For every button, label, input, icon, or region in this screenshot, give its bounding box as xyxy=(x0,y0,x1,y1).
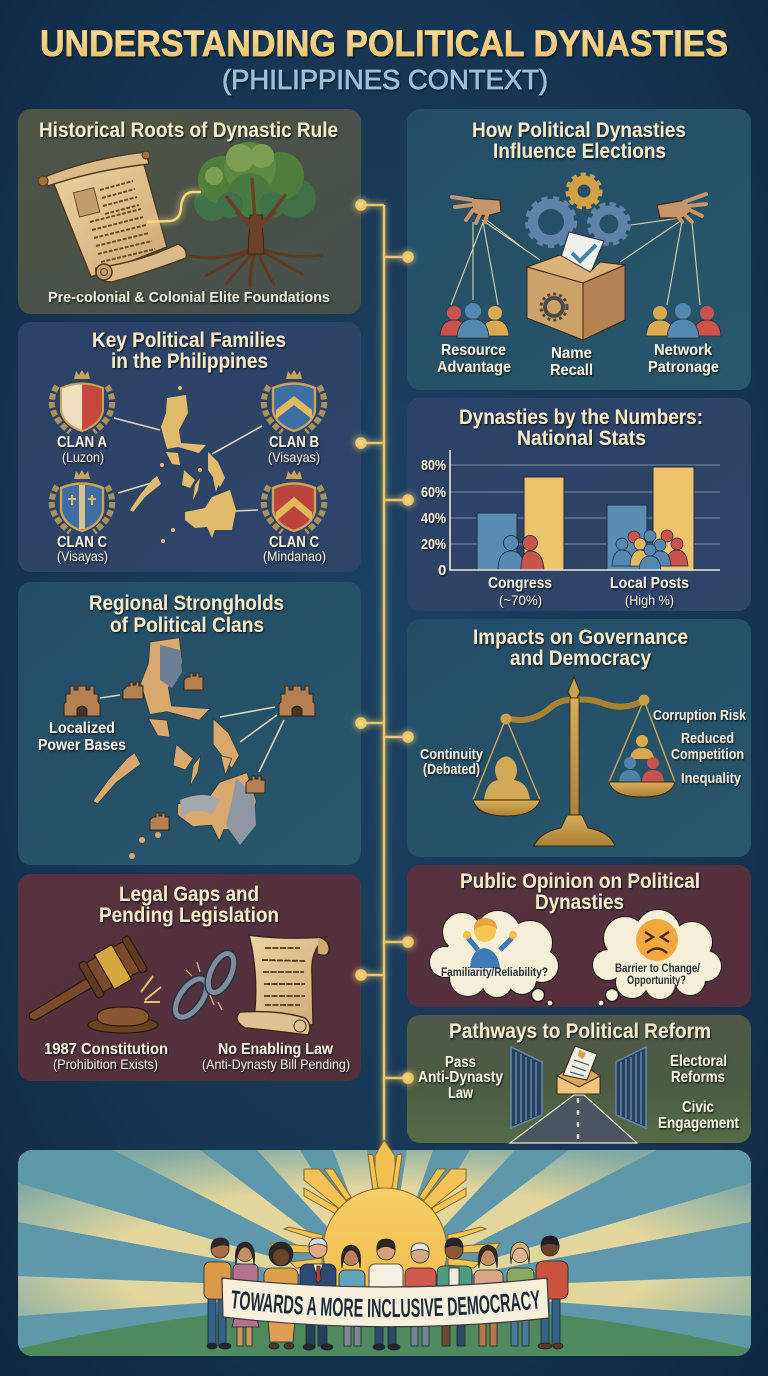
person 8 xyxy=(437,1238,472,1346)
heading: pathways: Pathways to Political Reform xyxy=(449,1020,711,1043)
thought cloud: barrier xyxy=(593,910,721,1006)
connector lines xyxy=(114,418,262,511)
labels: impacts: Reduced xyxy=(681,730,734,747)
heading: impacts: Impacts on Governance xyxy=(473,626,688,649)
labels: election factors: Resource xyxy=(441,342,506,359)
labels: clans: (Mindanao) xyxy=(263,548,326,564)
labels: reforms: Reforms xyxy=(671,1069,725,1086)
connector: scroll to tree xyxy=(147,192,201,222)
category labels: (High %) xyxy=(625,592,674,608)
panel: historical roots xyxy=(18,109,361,314)
icon: ballot box xyxy=(527,255,625,340)
banner text: TOWARDS A MORE INCLUSIVE DEMOCRACY xyxy=(232,1290,539,1318)
crest: clan b xyxy=(264,370,324,432)
person 4 xyxy=(300,1238,336,1350)
icon: people group left xyxy=(440,303,509,338)
heading: key political families: Key Political Families xyxy=(92,329,286,352)
labels: election factors: Recall xyxy=(550,362,593,379)
person 6 xyxy=(369,1239,403,1350)
heading: national stats xyxy=(459,406,703,450)
icon: law scroll xyxy=(237,935,329,1035)
person 2 xyxy=(232,1242,259,1346)
heading: impacts: and Democracy xyxy=(510,647,651,670)
icon: broken chain xyxy=(169,950,239,1022)
thought cloud: familiarity: Familiarity/Reliability? xyxy=(441,965,548,979)
label: localized power bases: Power Bases xyxy=(38,737,126,754)
labels: reforms: Anti-Dynasty xyxy=(418,1069,503,1086)
labels: reforms: Electoral xyxy=(670,1053,727,1070)
panel: public opinion xyxy=(407,865,751,1007)
person 7 xyxy=(405,1243,436,1346)
icon: left puppeteer hand xyxy=(452,197,501,223)
person 1 xyxy=(204,1238,231,1349)
title xyxy=(40,22,728,95)
labels: reforms: Civic xyxy=(682,1099,714,1116)
heading: regional strongholds: of Political Clans xyxy=(110,614,264,637)
philippine sun xyxy=(270,1154,500,1312)
heading: public opinion xyxy=(460,870,700,914)
labels: clans: CLAN C xyxy=(269,534,319,551)
icon: right puppeteer hand xyxy=(657,194,706,222)
panel: key political families xyxy=(18,322,361,572)
labels: impacts: Inequality xyxy=(681,770,742,787)
labels: election factors: Patronage xyxy=(648,359,719,376)
labels: impacts: Continuity xyxy=(420,746,484,763)
panel: influence on elections xyxy=(407,109,751,390)
labels: impacts: Corruption Risk xyxy=(653,707,747,724)
map: strongholds xyxy=(93,638,256,859)
local posts people xyxy=(612,530,688,570)
crest: clan c mindanao xyxy=(264,470,324,532)
heading: public opinion: Public Opinion on Political xyxy=(460,870,700,893)
labels: legal: (Anti-Dynasty Bill Pending) xyxy=(202,1056,350,1072)
heading: key political families: in the Philippines xyxy=(111,350,268,373)
icon: left gate xyxy=(511,1047,542,1128)
category labels: Congress xyxy=(488,575,552,592)
sunburst rays xyxy=(18,1150,751,1316)
person 5 xyxy=(339,1245,365,1346)
panel: regional strongholds xyxy=(18,582,361,865)
heading: impacts xyxy=(473,626,688,670)
banner xyxy=(221,1277,550,1328)
person 10 xyxy=(507,1242,534,1346)
caption: foundations: Pre-colonial & Colonial Elite Foundations xyxy=(48,289,330,306)
heading: public opinion: Dynasties xyxy=(535,891,624,914)
labels: clans: CLAN B xyxy=(269,434,319,451)
crest: clan c luzon side xyxy=(52,470,112,532)
axis labels: 60% xyxy=(421,484,446,501)
labels: clans: CLAN C xyxy=(57,534,107,551)
heading: influence on elections: Influence Elections xyxy=(493,140,666,163)
axis labels: 20% xyxy=(421,536,446,553)
labels: impacts: Competition xyxy=(671,746,744,763)
heading: legal gaps xyxy=(99,883,279,927)
panel: pathways to reform xyxy=(407,1015,751,1143)
emoji: distressed face xyxy=(636,919,678,961)
panel: inclusive democracy banner scene xyxy=(18,1139,751,1356)
timeline spine with connectors xyxy=(356,200,412,1150)
bar chart xyxy=(421,450,720,608)
map: philippines xyxy=(130,386,236,543)
icon: gavel xyxy=(29,935,158,1033)
icon: tree xyxy=(190,142,322,286)
labels: clans xyxy=(57,434,326,564)
labels: reforms: Law xyxy=(448,1085,473,1102)
thought cloud: familiarity xyxy=(430,911,558,1006)
person 9 xyxy=(474,1245,503,1346)
heading: regional strongholds xyxy=(89,592,284,637)
category labels xyxy=(488,575,689,608)
labels: election factors xyxy=(437,342,719,379)
heading: legal gaps: Pending Legislation xyxy=(99,904,279,927)
heading: key political families xyxy=(92,329,286,373)
axis labels xyxy=(421,457,446,579)
labels: impacts xyxy=(420,707,747,787)
right pan people xyxy=(619,735,664,782)
labels: clans: (Visayas) xyxy=(57,548,108,564)
impact marks xyxy=(141,976,161,1002)
labels: reforms xyxy=(418,1053,740,1132)
label: localized power bases: Localized xyxy=(49,720,115,737)
heading: influence on elections xyxy=(472,119,686,163)
labels: reforms: Pass xyxy=(445,1054,476,1071)
subtitle: (PHILIPPINES CONTEXT) xyxy=(222,64,548,95)
hill xyxy=(20,1314,750,1356)
panel: national stats xyxy=(407,398,751,611)
spine arrow tip xyxy=(375,1140,395,1188)
axis labels: 0 xyxy=(438,562,446,579)
axis labels: 80% xyxy=(421,457,446,474)
labels: clans: CLAN A xyxy=(57,434,107,451)
labels: election factors: Name xyxy=(551,345,592,362)
axis labels: 40% xyxy=(421,510,446,527)
labels: election factors: Network xyxy=(654,342,712,359)
icon: envelope with letter xyxy=(557,1046,600,1094)
heading: historical roots: Historical Roots of Dynastic Rule xyxy=(39,119,338,142)
congress bars xyxy=(477,477,564,570)
heading: influence on elections: How Political Dynasties xyxy=(472,119,686,142)
labels: legal: 1987 Constitution xyxy=(44,1041,168,1058)
labels: legal: (Prohibition Exists) xyxy=(53,1056,158,1072)
icon: right gate xyxy=(616,1047,646,1128)
category labels: (~70%) xyxy=(499,592,542,608)
icon: scroll xyxy=(38,151,186,282)
labels: reforms: Engagement xyxy=(658,1115,740,1132)
left pan person xyxy=(484,756,530,800)
icon: balance scale xyxy=(473,677,675,846)
icon: castles xyxy=(64,673,315,830)
labels: legal xyxy=(44,1041,350,1072)
icon: ballot paper xyxy=(559,232,604,272)
icon: road xyxy=(510,1095,637,1143)
panel: impacts on governance xyxy=(407,619,751,857)
thought cloud: barrier: Opportunity? xyxy=(627,973,686,987)
local posts bars xyxy=(607,467,694,570)
thought cloud: barrier: Barrier to Change/ xyxy=(615,961,701,975)
labels: clans: (Luzon) xyxy=(62,449,104,465)
connector lines xyxy=(100,695,284,772)
icon: people group right xyxy=(646,303,721,338)
labels: clans: (Visayas) xyxy=(268,449,320,465)
heading: regional strongholds: Regional Strongholds xyxy=(89,592,284,615)
heading: national stats: National Stats xyxy=(517,427,646,450)
panel: legal gaps xyxy=(18,874,361,1081)
strings xyxy=(451,218,700,305)
heading: national stats: Dynasties by the Numbers: xyxy=(459,406,703,429)
heading: legal gaps: Legal Gaps and xyxy=(119,883,259,906)
person 3 xyxy=(264,1242,298,1349)
group of eleven people xyxy=(204,1236,568,1350)
congress people xyxy=(498,536,544,570)
emoji: shrugging person xyxy=(463,918,517,968)
icon: gears xyxy=(528,175,628,245)
labels: legal: No Enabling Law xyxy=(218,1041,333,1058)
labels: election factors: Advantage xyxy=(437,359,511,376)
crest: clan a xyxy=(52,370,112,432)
category labels: Local Posts xyxy=(610,575,689,592)
labels: impacts: (Debated) xyxy=(423,761,480,778)
person 11 xyxy=(536,1236,568,1349)
label: localized power bases xyxy=(38,720,126,754)
